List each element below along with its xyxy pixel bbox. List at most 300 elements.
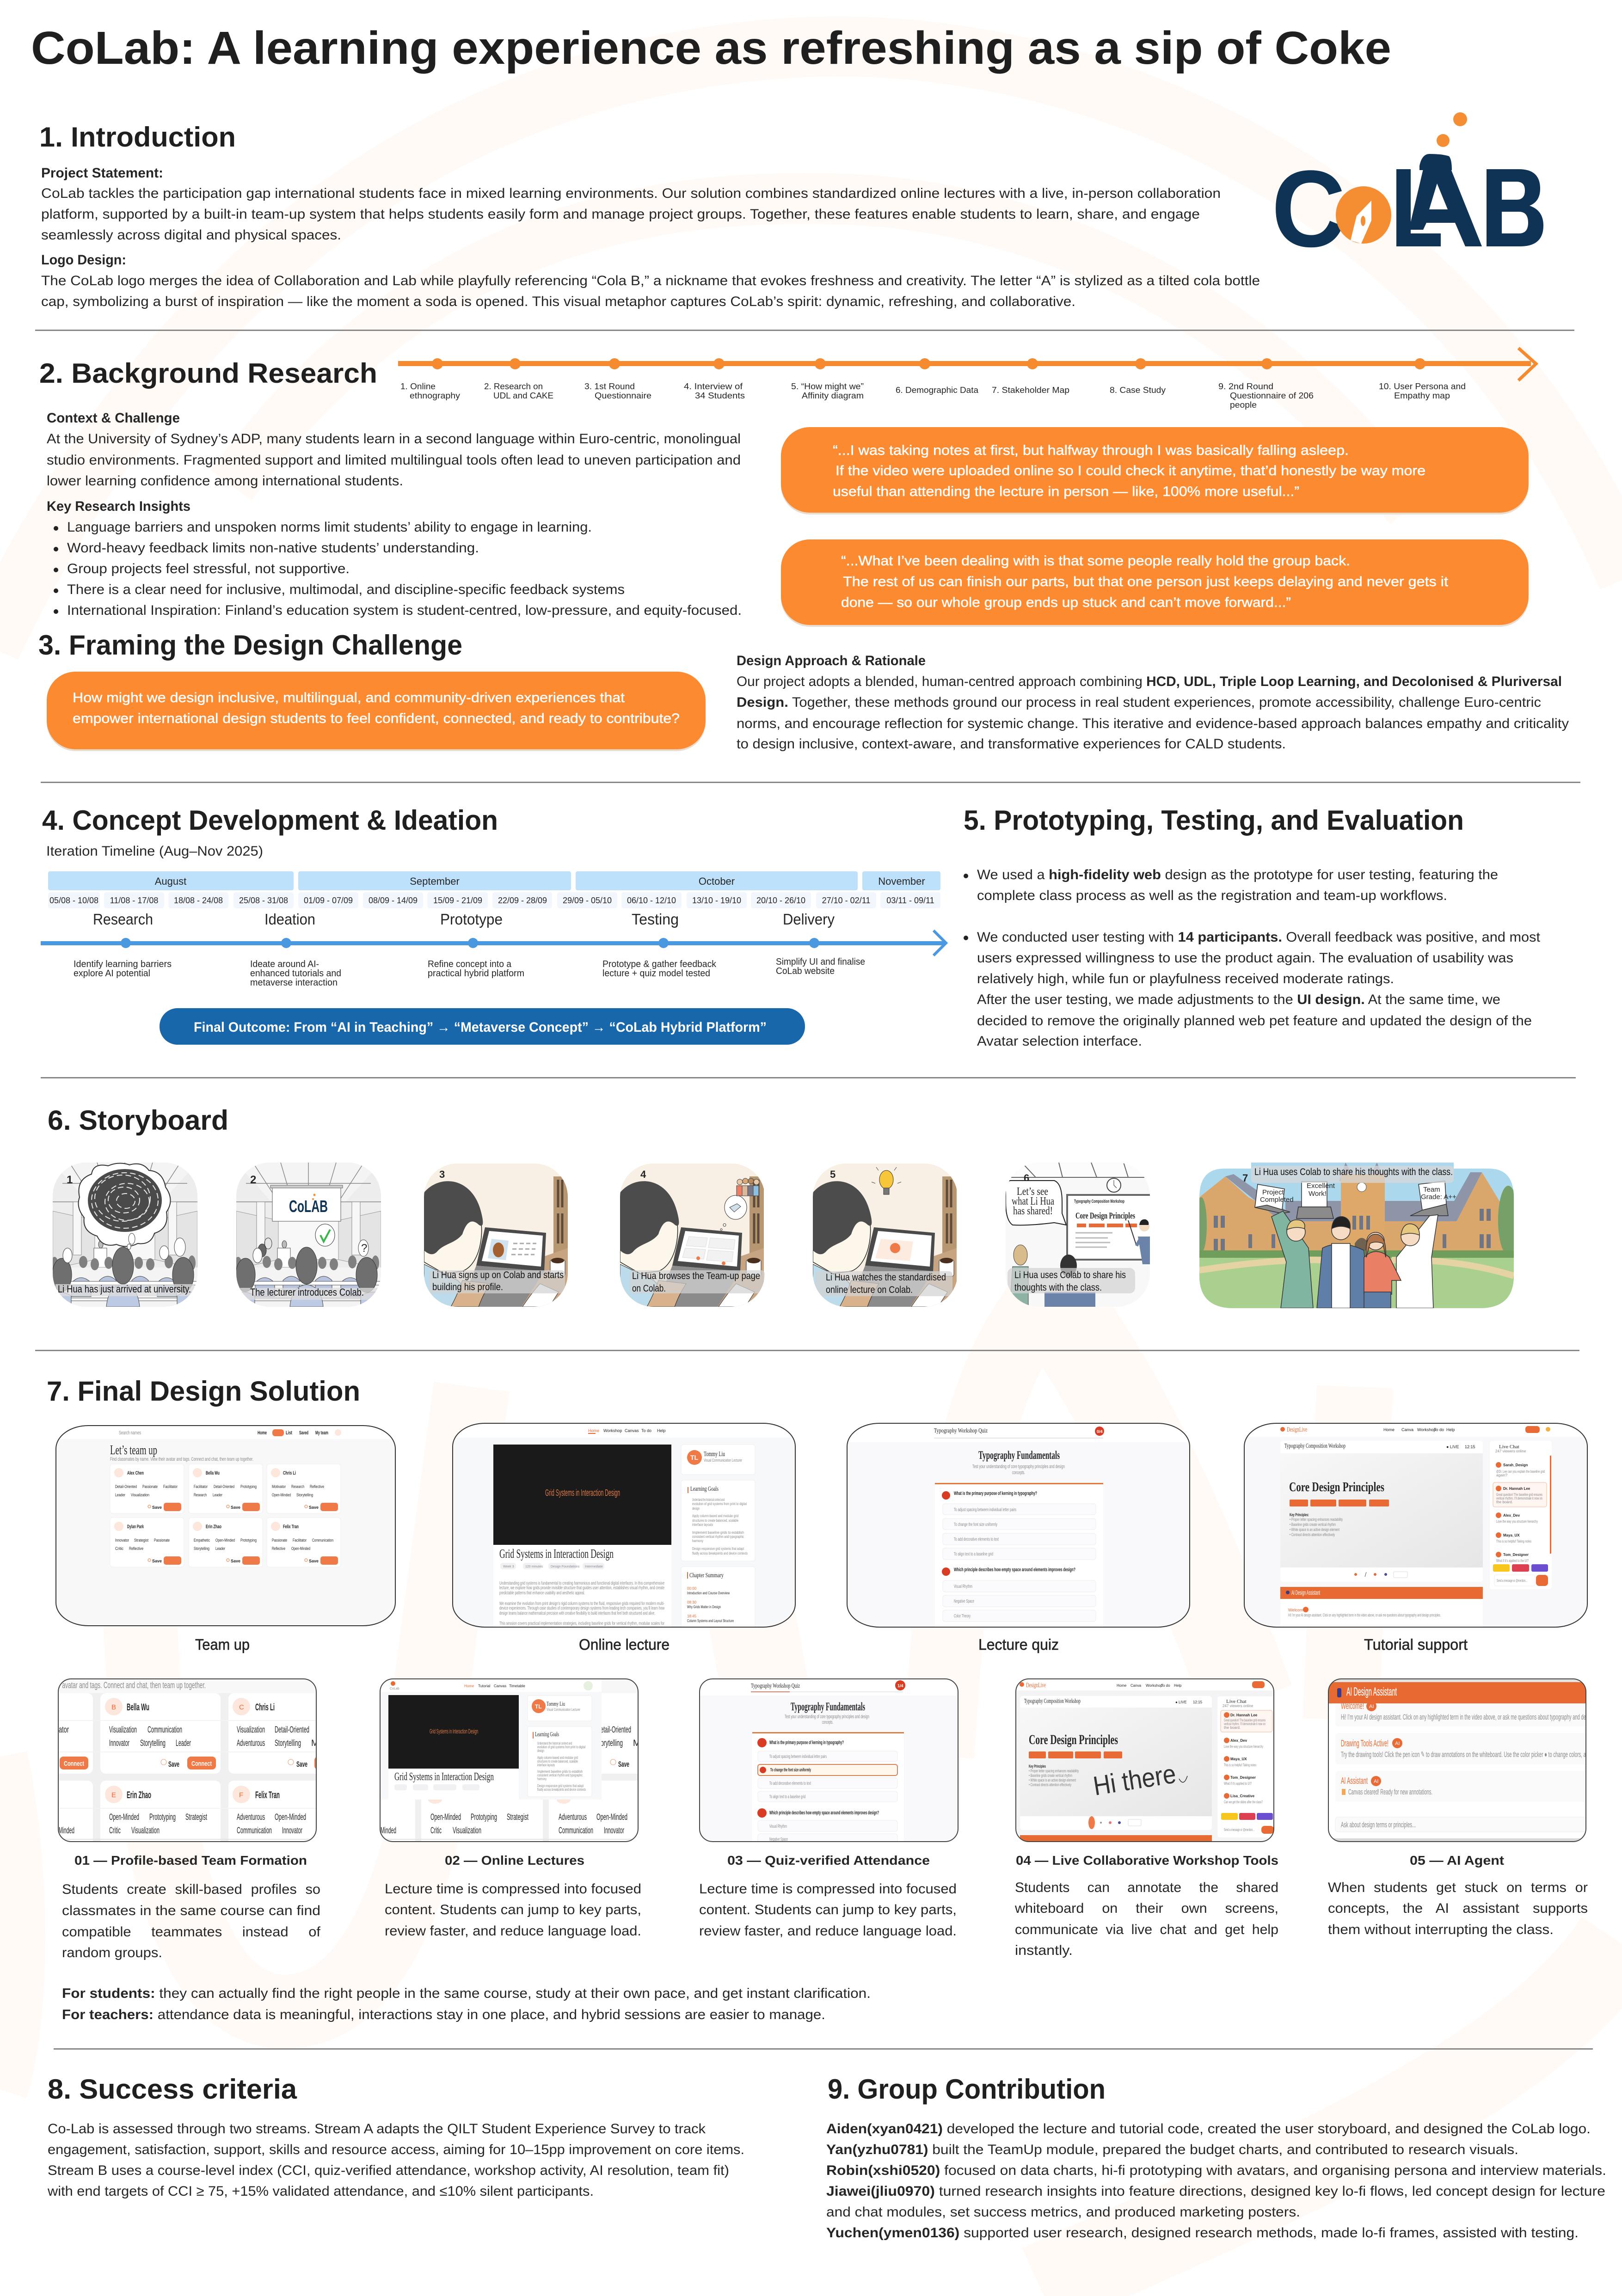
- stage descriptions: enhanced tutorials and: [250, 968, 341, 979]
- screenshot: online lecture: harmony: [692, 1539, 703, 1543]
- detail card: live collaborative workshop tools: • Contrast directs attention effectively: [1029, 1782, 1071, 1787]
- detail card: profile-based team formation: Adventurous: [237, 1739, 265, 1748]
- screenshot: online lecture: structures to create balanced, scalable: [692, 1518, 738, 1523]
- screenshot: team up: Research: [291, 1484, 304, 1489]
- screenshot: online lecture: Column Systems and Layout Structure: [687, 1619, 734, 1623]
- screenshot: tutorial support: Key Principles:: [1290, 1512, 1309, 1517]
- storyboard frame 6: Typography Composition Workshop: [1074, 1199, 1124, 1204]
- text block: logo design: Logo Design:: [41, 252, 126, 268]
- detail card: AI agent: AI: [1369, 1704, 1374, 1709]
- research timeline arrow: 8. Case Study: [1110, 386, 1166, 395]
- storyboard frame 7: campus celebration: [1196, 1163, 1518, 1308]
- detail card: online lectures: Learning Goals: [535, 1731, 559, 1738]
- research timeline arrow: Questionnaire: [595, 391, 651, 400]
- feature title and text: 05: concepts, the AI assistant supports: [1328, 1901, 1588, 1916]
- detail card: quiz-verified attendance: To add decorative elements to text: [769, 1781, 811, 1786]
- screenshot: tutorial support: • Contrast directs attention effectively: [1290, 1532, 1335, 1537]
- week cells: 15/09 - 21/09: [433, 896, 482, 905]
- detail card: live collaborative workshop tools: Hi there: [1091, 1758, 1178, 1801]
- screenshot: team up: Critic: [115, 1546, 123, 1551]
- screenshot: online lecture: Grid Systems in Interaction Design: [545, 1488, 620, 1498]
- screenshot: tutorial support: Core Design Principles: [1289, 1480, 1384, 1494]
- storyboard frame 3: 3: [439, 1169, 445, 1180]
- stage descriptions: practical hybrid platform: [428, 968, 524, 979]
- week cells: 08/09 - 14/09: [369, 896, 418, 905]
- screenshot: team up: Save: [231, 1559, 240, 1563]
- heading: concept development: 4. Concept Development & Ideation: [42, 805, 498, 836]
- feature title and text: 05: [1328, 1853, 1588, 1937]
- research timeline arrow: 9. 2nd Round: [1218, 382, 1273, 391]
- detail card: profile-based team formation: Prototyping: [149, 1812, 176, 1822]
- screenshot: tutorial support: 247 viewers online: [1495, 1449, 1526, 1453]
- detail card: quiz-verified attendance: To change the font size uniformly: [770, 1768, 811, 1773]
- detail card: profile-based team formation: B: [111, 1703, 116, 1711]
- screenshot: team up: Prototyping: [240, 1538, 257, 1543]
- detail card: live collaborative workshop tools: Live Chat: [1226, 1699, 1247, 1704]
- text block: contributions: Yan(yzhu0781) built the TeamUp module, prepared the budget charts, and contributed to research visuals.: [826, 2142, 1518, 2157]
- detail card: quiz-verified attendance: concepts.: [822, 1720, 833, 1725]
- detail card: quiz-verified attendance: Visual Rhythm: [769, 1824, 787, 1829]
- screenshot: team up: Save: [152, 1505, 162, 1510]
- research timeline arrow: 5. “How might we”: [791, 382, 864, 391]
- screenshot: lecture quiz: Which principle describes how empty space around elements improves design?: [954, 1567, 1075, 1573]
- detail card: profile-based team formation: Connect: [64, 1760, 84, 1768]
- text block: context and challenge: studio environments. Fragmented support and limited multilingual tools often lead to uneven participation and: [47, 453, 741, 468]
- screenshot: tutorial support: again?: [1496, 1473, 1508, 1477]
- screenshot: online lecture: Why Grids Matter in Design: [687, 1605, 721, 1609]
- text block: contributions: Jiawei(jliu0970) turned research insights into feature directions, designed key lo-fi flows, led concept design for lecture: [826, 2184, 1605, 2199]
- heading: framing the design challenge: 3. Framing the Design Challenge: [38, 630, 462, 661]
- research timeline arrow: 2. Research on: [484, 382, 543, 391]
- feature title and text: 05: them without interrupting the class.: [1328, 1922, 1554, 1937]
- detail card: live collaborative workshop tools: • Baseline grids create vertical rhythm: [1029, 1773, 1072, 1778]
- screenshot: team up: Let’s team up: [110, 1443, 157, 1457]
- text block: success criteria: with end targets of CCI ≥ 75, +15% validated attendance, and ≤10% silent participants.: [47, 2184, 594, 2199]
- screenshot: online lecture: lecture, we explore how grids provide invisible structure that guides user attention, establishes visual rhythm, and create: [499, 1586, 664, 1591]
- screenshot: online lecture: Implement baseline grids to establish: [692, 1531, 744, 1535]
- storyboard frame 2: [234, 1163, 381, 1307]
- screenshot: online lecture: Canvas: [625, 1428, 639, 1433]
- feature title and text: 02: 02 — Online Lectures: [445, 1853, 584, 1867]
- detail card: quiz-verified attendance: [700, 1679, 958, 1845]
- detail card: profile-based team formation: ator: [59, 1725, 69, 1735]
- storyboard frame 2: 2: [250, 1174, 256, 1186]
- screenshot: lecture quiz: Test your understanding of core typography principles and design: [972, 1464, 1065, 1469]
- subheading: iteration timeline: Iteration Timeline (Aug–Nov 2025): [46, 844, 263, 859]
- screenshot: online lecture: Visual Communication Lecturer: [704, 1458, 742, 1463]
- detail card: live collaborative workshop tools: • Proper letter spacing enhances readability: [1029, 1769, 1079, 1773]
- detail card: live collaborative workshop tools: Typography Composition Workshop: [1024, 1698, 1081, 1705]
- screenshot: team up: Facilitator: [293, 1538, 307, 1543]
- detail card: profile-based team formation: Leader: [176, 1739, 191, 1748]
- detail card: profile-based team formation: C: [239, 1703, 244, 1711]
- stage descriptions: Ideate around AI-: [250, 959, 319, 969]
- text block: testing bullets: complete class process as well as the registration and team-up workflows.: [977, 888, 1447, 903]
- storyboard frame 6: what Li Hua: [1012, 1195, 1054, 1207]
- screenshot: tutorial support: • Baseline grids create vertical rhythm: [1290, 1522, 1336, 1527]
- detail card: live collaborative workshop tools: Love the way you structure hierarchy: [1224, 1745, 1263, 1749]
- detail card: profile-based team formation: Strategist: [185, 1812, 207, 1822]
- caption: lecture quiz: Lecture quiz: [978, 1636, 1059, 1653]
- feature title and text: 05: 05 — AI Agent: [1410, 1853, 1504, 1867]
- screenshot: tutorial support: • White space is an active design element: [1290, 1527, 1339, 1532]
- screenshot: lecture quiz: [847, 1423, 1190, 1631]
- screenshot: tutorial support: AI Design Assistant: [1291, 1589, 1320, 1596]
- screenshot: tutorial support: 12:15: [1465, 1445, 1475, 1449]
- detail card: quiz-verified attendance: Typography Workshop Quiz: [751, 1683, 800, 1690]
- detail card: online lectures: [373, 1679, 646, 1846]
- storyboard frame 6: Let’s see: [1017, 1186, 1048, 1198]
- caption: team up: Team up: [195, 1636, 250, 1653]
- detail card: quiz-verified attendance: Which principle describes how empty space around elements improves design?: [769, 1810, 879, 1816]
- month bars: November: [878, 876, 925, 887]
- feature title and text: 01: random groups.: [62, 1945, 162, 1960]
- detail card: online lectures: Critic: [430, 1826, 442, 1836]
- detail card: online lectures: Tommy Liu: [547, 1700, 565, 1707]
- storyboard frame 6: Li Hua uses Colab to share his: [1014, 1270, 1126, 1280]
- detail card: quiz-verified attendance: Negative Space: [769, 1837, 788, 1842]
- feature title and text: 04: whiteboard on their own screens,: [1014, 1901, 1278, 1916]
- storyboard frame 7: campus celebration: Work!: [1309, 1190, 1327, 1198]
- detail card: live collaborative workshop tools: Canva: [1130, 1684, 1142, 1688]
- research timeline arrow: people: [1230, 400, 1257, 410]
- screenshot: lecture quiz: concepts.: [1012, 1470, 1025, 1476]
- screenshot: team up: Leader: [115, 1493, 125, 1497]
- section 3: framing the design challenge: [38, 630, 1569, 752]
- detail card: profile-based team formation: Detail-Oriented: [275, 1725, 309, 1735]
- screenshot: tutorial support: Canva: [1401, 1427, 1413, 1432]
- detail card: profile-based team formation: Chris Li: [255, 1702, 275, 1713]
- text block: for students and teachers: For teachers: attendance data is meaningful, interactions stay in one place, and hybrid sessions are easier to manage.: [62, 2007, 825, 2022]
- detail card: online lectures: Timetable: [509, 1684, 525, 1688]
- feature title and text: 02: review faster, and reduce language load.: [385, 1923, 641, 1939]
- detail card: live collaborative workshop tools: Tom_Designer: [1230, 1776, 1256, 1780]
- detail card: online lectures: Open-Minded: [430, 1812, 461, 1822]
- screenshot: online lecture: Learning Goals: [690, 1486, 719, 1493]
- screenshot: online lecture: Understanding grid systems is fundamental to creating harmonious and functional digital interfaces. In this comprehensive: [499, 1581, 664, 1586]
- detail card: online lectures: Prototyping: [471, 1812, 497, 1822]
- detail card: profile-based team formation: E: [111, 1791, 116, 1799]
- text block: project statement: [41, 165, 1221, 243]
- text block: testing bullets: We used a high-fidelity web design as the prototype for user testing, featuring the: [977, 867, 1498, 882]
- text block: contributions: and chat modules, set success metrics, and produced marketing posters.: [826, 2204, 1300, 2220]
- storyboard frame 7: campus celebration: Project: [1262, 1188, 1284, 1196]
- week cells: 11/08 - 17/08: [110, 896, 158, 905]
- detail card: profile-based team formation: Innovator: [282, 1826, 302, 1836]
- feature title and text: 01: compatible teammates instead of: [62, 1924, 321, 1940]
- text block: key research insights: [47, 499, 742, 618]
- feature title and text: 03: content. Students can jump to key parts,: [699, 1902, 957, 1917]
- screenshot: tutorial support: vertical rhythm. I’ll demonstrate it now on: [1496, 1496, 1542, 1500]
- detail card: profile-based team formation: Erin Zhao: [127, 1790, 151, 1800]
- detail card: live collaborative workshop tools: Workshop: [1146, 1684, 1162, 1688]
- storyboard frame 7: campus celebration: 7: [1242, 1172, 1248, 1184]
- detail card: profile-based team formation: Storytelling: [275, 1739, 301, 1748]
- feature title and text: 03: 03 — Quiz-verified Attendance: [727, 1853, 930, 1867]
- callout: student quote 1: [781, 427, 1529, 514]
- detail card: live collaborative workshop tools: Lisa_Creative: [1230, 1794, 1255, 1798]
- detail card: live collaborative workshop tools: vertical rhythm. I’ll demonstrate it now on: [1224, 1722, 1266, 1726]
- text block: project statement: Project Statement:: [41, 165, 163, 181]
- storyboard frame 4: on Colab.: [632, 1283, 666, 1294]
- text block: context and challenge: Context & Challenge: [47, 410, 180, 426]
- detail card: live collaborative workshop tools: This is so helpful! Taking notes: [1224, 1763, 1256, 1767]
- feature title and text: 03: [699, 1853, 957, 1939]
- week cells: 18/08 - 24/08: [174, 896, 223, 905]
- screenshot: team up: Leader: [215, 1546, 225, 1551]
- heading: introduction: 1. Introduction: [39, 122, 236, 153]
- feature title and text: 01: Students create skill-based profiles so: [62, 1882, 320, 1897]
- research timeline arrow: [398, 348, 1536, 410]
- month bars: October: [699, 876, 735, 887]
- stage descriptions: Identify learning barriers: [74, 959, 172, 969]
- feature title and text: 02: Lecture time is compressed into focused: [385, 1881, 641, 1897]
- screenshot: tutorial support: Alex_Dev: [1503, 1513, 1520, 1518]
- screenshot: team up: Alex Chen: [127, 1470, 144, 1476]
- screenshot: online lecture: Intermediate: [585, 1565, 603, 1568]
- screenshot: team up: Dylan Park: [127, 1524, 144, 1530]
- detail card: online lectures: TL: [535, 1703, 542, 1710]
- screenshot: tutorial support: Maya_UX: [1503, 1533, 1520, 1537]
- feature title and text: 01: 01 — Profile-based Team Formation: [74, 1853, 307, 1867]
- screenshot: team up: Research: [194, 1493, 207, 1497]
- detail card: profile-based team formation: Minded: [59, 1826, 74, 1836]
- logo: CoLAB: [1272, 112, 1543, 270]
- text block: key research insights: There is a clear need for inclusive, multimodal, and discipline-specific feedback systems: [67, 582, 625, 597]
- screenshot: online lecture: consistent vertical rhythm and typographic: [692, 1535, 744, 1539]
- text block: contributions: Yuchen(ymen0136) supported user research, designed research methods, made lo-fi frames, assisted with testing.: [826, 2225, 1579, 2241]
- stage descriptions: metaverse interaction: [250, 978, 338, 988]
- storyboard frame 6: has shared!: [1013, 1205, 1053, 1217]
- screenshot: lecture quiz: To align text to a baseline grid: [954, 1552, 993, 1557]
- detail card: AI agent: Canvas cleared! Ready for new annotations.: [1348, 1788, 1432, 1796]
- screenshot: online lecture: interface layouts: [692, 1523, 713, 1527]
- screenshot: team up: Passionate: [154, 1538, 170, 1543]
- screenshot: online lecture: 120 minutes: [525, 1565, 543, 1568]
- screenshot: team up: Communication: [312, 1538, 333, 1543]
- detail card: AI agent: [1328, 1679, 1594, 1842]
- feature title and text: 04: [1014, 1853, 1278, 1958]
- feature title and text: 01: classmates in the same course can find: [62, 1903, 320, 1918]
- detail card: online lectures: Save: [618, 1760, 629, 1769]
- text block: testing bullets: After the user testing, we made adjustments to the UI design. At the same time, we: [977, 992, 1500, 1007]
- text block: key research insights: Word-heavy feedback limits non-native students’ understanding.: [67, 540, 479, 556]
- detail card: live collaborative workshop tools: Maya_UX: [1230, 1757, 1247, 1761]
- screenshot: online lecture: design teams balance mathematical precision with creative flexibility to build interfaces that feel both structured and alive.: [499, 1611, 655, 1616]
- screenshot: team up: List: [286, 1430, 292, 1436]
- screenshot: tutorial support: What if it’s applied to the UI?: [1496, 1559, 1529, 1563]
- iteration arrow: [41, 931, 946, 955]
- detail card: online lectures: Design responsive grid systems that adapt: [537, 1784, 584, 1788]
- screenshot: team up: Motivator: [272, 1484, 286, 1489]
- text block: project statement: platform, supported by a built-in team-up system that helps students easily form and manage project groups. Together, these features enable students to learn, share, and engage: [41, 207, 1200, 222]
- screenshot: lecture quiz: What is the primary purpose of kerning in typography?: [954, 1491, 1037, 1496]
- screenshot: online lecture: Help: [657, 1428, 666, 1433]
- screenshot: tutorial support: @Dr. Lee can you explain the baseline grid: [1496, 1469, 1545, 1474]
- screenshot: tutorial support: the board.: [1496, 1500, 1513, 1504]
- storyboard frame 6: 6: [1024, 1172, 1029, 1184]
- research timeline arrow: UDL and CAKE: [493, 391, 553, 400]
- research timeline arrow: 1. Online: [400, 382, 436, 391]
- screenshot: team up: Save: [231, 1505, 240, 1510]
- research timeline arrow: Questionnaire of 206: [1230, 391, 1314, 400]
- detail card: AI agent: AI: [1374, 1779, 1378, 1784]
- detail card: profile-based team formation: Adventurous: [237, 1812, 265, 1822]
- storyboard frame 4: 4: [640, 1169, 646, 1180]
- detail card: profile-based team formation: Mo: [311, 1739, 323, 1748]
- section 5: prototyping testing evaluation: [964, 805, 1541, 1049]
- week cells: 01/09 - 07/09: [304, 896, 353, 905]
- text block: contributions: Robin(xshi0520) focused on data charts, hi-fi prototyping with avatars, and organising persona and interview materials.: [826, 2163, 1606, 2178]
- storyboard frame 5: online lecture on Colab.: [826, 1285, 913, 1295]
- screenshot: tutorial support: This is so helpful! Taking notes: [1496, 1539, 1531, 1543]
- stage labels: Testing: [632, 911, 679, 928]
- screenshot: team up: Detail-Oriented: [214, 1484, 234, 1489]
- detail card: online lectures: Open-Minded: [596, 1812, 627, 1822]
- screenshot: online lecture: Apply column-based and modular grid: [692, 1514, 738, 1518]
- screenshot: tutorial support: Tom_Designer: [1503, 1553, 1529, 1557]
- text block: testing bullets: decided to remove the originally planned web pet feature and updated the design of the: [977, 1013, 1532, 1029]
- screenshot: online lecture: Week 3: [503, 1565, 514, 1568]
- detail card: online lectures: Understand the historical context and: [537, 1741, 572, 1745]
- screenshot: lecture quiz: Color Theory: [954, 1614, 971, 1619]
- detail card: online lectures: interface layouts: [537, 1763, 555, 1767]
- detail card: profile-based team formation: Storytelling: [140, 1739, 166, 1748]
- storyboard frame 2: CoLAB: [289, 1197, 328, 1216]
- detail card: AI agent: AI Design Assistant: [1346, 1685, 1397, 1698]
- detail card: online lectures: Grid Systems in Interaction Design: [430, 1727, 478, 1735]
- callout: student quote 2: done — so our whole group ends up stuck and can’t move forward...”: [841, 595, 1291, 610]
- screenshot: tutorial support: ● LIVE: [1446, 1445, 1459, 1449]
- screenshot: tutorial support: Great question! The baseline grid ensures: [1496, 1493, 1542, 1497]
- screenshot: team up: Passionate: [142, 1484, 158, 1489]
- detail card: live collaborative workshop tools: • White space is an active design element: [1029, 1778, 1076, 1782]
- week cells: 05/08 - 10/08: [49, 896, 98, 905]
- storyboard frame 3: building his profile.: [432, 1282, 503, 1292]
- detail card: profile-based team formation: Bella Wu: [127, 1702, 149, 1713]
- screenshot: team up: Empathetic: [194, 1538, 210, 1543]
- screenshot: team up: Open-Minded: [291, 1546, 310, 1551]
- storyboard frame 6: Core Design Principles: [1075, 1211, 1135, 1221]
- detail card: online lectures: fluidly across breakpoints and device contexts: [537, 1788, 586, 1792]
- detail card: online lectures: design: [537, 1749, 544, 1753]
- detail card: online lectures: Grid Systems in Interaction Design: [394, 1771, 494, 1783]
- storyboard frame 7: campus celebration: Team: [1423, 1186, 1440, 1194]
- detail card: online lectures: Canvas: [494, 1684, 506, 1688]
- screenshot: tutorial support: Workshop: [1417, 1427, 1436, 1432]
- screenshot: online lecture: design: [692, 1506, 700, 1511]
- feature title and text: 05: When students get stuck on terms or: [1328, 1880, 1588, 1895]
- storyboard frame 5: Li Hua watches the standardised: [826, 1272, 946, 1283]
- storyboard frame 2: The lecturer introduces Colab.: [250, 1286, 364, 1298]
- storyboard frame 4: Li Hua browses the Team-up page: [632, 1271, 760, 1281]
- detail card: profile-based team formation: F: [239, 1791, 243, 1799]
- screenshot: online lecture: Introduction and Course Overview: [687, 1591, 730, 1595]
- detail card: live collaborative workshop tools: Alex_Dev: [1230, 1739, 1247, 1743]
- heading: success criteria: 8. Success criteria: [48, 2074, 297, 2105]
- screenshot: team up: Chris Li: [283, 1470, 296, 1476]
- detail card: online lectures: Visual Communication Lecturer: [547, 1708, 580, 1712]
- text block: design approach and rationale: norms, and encourage reflection for systemic change. This iterative and evidence-based approach balances empathy and criticality: [737, 716, 1569, 731]
- detail card: quiz-verified attendance: Test your understanding of core typography principles and design: [785, 1714, 869, 1720]
- screenshot: online lecture: device experiences. Through case studies of contemporary design systems from leading tech companies, you’ll learn how: [499, 1606, 665, 1611]
- text block: testing bullets: We conducted user testing with 14 participants. Overall feedback was positive, and most: [977, 930, 1541, 945]
- feature title and text: 04: communicate via live chat and get help: [1015, 1922, 1278, 1937]
- week cells: 13/10 - 19/10: [692, 896, 741, 905]
- detail card: AI agent: Welcome!: [1341, 1701, 1364, 1711]
- feature title and text: 02: content. Students can jump to key parts,: [385, 1902, 641, 1917]
- text block: key research insights: Language barriers and unspoken norms limit students’ ability to engage in learning.: [67, 520, 592, 535]
- screenshot: team up: Save: [152, 1559, 162, 1563]
- detail card: profile-based team formation: Open-Minded: [275, 1812, 306, 1822]
- screenshot: lecture quiz: 0/4: [1097, 1429, 1103, 1434]
- screenshot: tutorial support: Dr. Hannah Lee: [1503, 1487, 1530, 1491]
- text block: design approach and rationale: Design. Together, these methods ground our process in real student experiences, promote accessibility, challenge Euro-centric: [737, 695, 1541, 710]
- screenshot: lecture quiz: To change the font size uniformly: [954, 1522, 997, 1527]
- screenshot: online lecture: To do: [641, 1428, 651, 1433]
- screenshot: online lecture: We examine the evolution from print design’s rigid column systems to the fluid, responsive grids required for modern multi-: [499, 1601, 664, 1606]
- week cells: [48, 892, 940, 908]
- heading: group contribution: 9. Group Contribution: [828, 2074, 1106, 2105]
- detail card: profile-based team formation: r avatar and tags. Connect and chat, then team up together.: [59, 1681, 206, 1690]
- screenshot: online lecture: fluidly across breakpoints and device contexts: [692, 1551, 748, 1555]
- text block: testing bullets: relatively high, while fun or playfulness received moderate ratings.: [977, 971, 1394, 986]
- screenshot: team up: Search names: [119, 1430, 141, 1436]
- screenshot: team up: Facilitator: [163, 1484, 178, 1489]
- research timeline arrow: 10. User Persona and: [1379, 382, 1466, 391]
- text block: key research insights: International Inspiration: Finland’s education system is student-centred, low-pressure, and equity-focused.: [67, 603, 742, 618]
- text block: design approach and rationale: [737, 653, 1569, 752]
- detail card: online lectures: evolution of grid systems from print to digital: [537, 1745, 585, 1749]
- section 1: introduction: [39, 112, 1543, 309]
- screenshot: online lecture: 00:00: [687, 1586, 697, 1591]
- research timeline arrow: 4. Interview of: [684, 382, 743, 391]
- screenshot: team up: Save: [309, 1505, 319, 1510]
- callout: student quote 1: “...I was taking notes at first, but halfway through I was basically falling asleep.: [833, 443, 1349, 458]
- stage labels: Research: [93, 911, 153, 928]
- feature title and text: 04: 04 — Live Collaborative Workshop Tools: [1016, 1853, 1278, 1867]
- storyboard frame 3: [424, 1163, 568, 1307]
- research timeline arrow: Empathy map: [1394, 391, 1450, 400]
- detail card: live collaborative workshop tools: DesignLive: [1026, 1682, 1046, 1689]
- detail card: live collaborative workshop tools: Key Principles: [1029, 1764, 1046, 1769]
- screenshot: tutorial support: Help: [1446, 1427, 1455, 1432]
- screenshot: tutorial support: Hi! I’m your AI design assistant. Click on any highlighted term in the video above, or ask me questions about typography and design principles.: [1288, 1613, 1441, 1617]
- detail card: online lectures: Implement baseline grids to establish: [537, 1769, 583, 1774]
- text block: logo design: cap, symbolizing a burst of inspiration — like the moment a soda is opened. This visual metaphor captures CoLab’s spirit: dynamic, refreshing, and collaborative.: [41, 294, 1075, 309]
- research timeline arrow: 7. Stakeholder Map: [992, 386, 1069, 395]
- screenshot: team up: Home: [258, 1430, 267, 1436]
- research timeline arrow: ethnography: [410, 391, 460, 400]
- callout: student quote 1: If the video were uploaded online so I could check it anytime, that’d honestly be way more: [836, 463, 1425, 478]
- storyboard frame 1: [51, 1163, 197, 1307]
- detail card: profile-based team formation: Connect: [191, 1760, 212, 1768]
- text block: key research insights: Group projects feel stressful, not supportive.: [67, 561, 350, 576]
- screenshot: online lecture: 08:30: [687, 1600, 697, 1604]
- storyboard frame 6: [1006, 1163, 1155, 1310]
- detail card: live collaborative workshop tools: To do: [1161, 1684, 1170, 1688]
- feature title and text: 01: [62, 1853, 321, 1960]
- research timeline arrow: 6. Demographic Data: [896, 386, 979, 395]
- detail card: AI agent: Drawing Tools Active!: [1341, 1739, 1389, 1749]
- screenshot: online lecture: [453, 1423, 795, 1631]
- callout: student quote 2: The rest of us can finish our parts, but that one person just keeps delaying and never gets it: [843, 574, 1449, 589]
- section 2: background research: [39, 348, 1536, 627]
- caption: online lecture: Online lecture: [579, 1636, 670, 1653]
- text block: contributions: [826, 2121, 1606, 2241]
- screenshot: team up: Felix Tran: [283, 1524, 299, 1530]
- research timeline arrow: 3. 1st Round: [584, 382, 635, 391]
